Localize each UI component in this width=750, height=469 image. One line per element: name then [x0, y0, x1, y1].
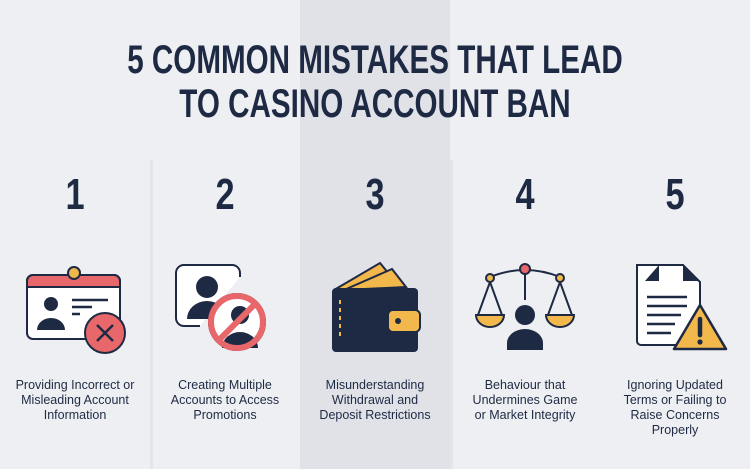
text 4 [473, 378, 577, 422]
title [127, 38, 623, 126]
icon: wallet [332, 262, 421, 352]
text 3 [319, 378, 431, 422]
icon: scales of justice with person [475, 263, 575, 350]
text 5: Properly [652, 423, 698, 437]
icon: ID card with x [26, 266, 126, 354]
text 5: Ignoring Updated [627, 378, 723, 392]
text 5 [624, 378, 726, 437]
number 1: 1 [65, 170, 85, 219]
text 4: Undermines Game [473, 393, 577, 407]
text 3: Withdrawal and [332, 393, 418, 407]
text 4: or Market Integrity [475, 408, 575, 422]
text 1: Misleading Account [21, 393, 129, 407]
number 5: 5 [665, 170, 685, 219]
text 1: Providing Incorrect or [16, 378, 134, 392]
text 2: Accounts to Access [171, 393, 279, 407]
text 5: Terms or Failing to [624, 393, 726, 407]
text 1: Information [44, 408, 106, 422]
text 4: Behaviour that [485, 378, 565, 392]
number 4: 4 [515, 170, 535, 219]
text 3: Deposit Restrictions [319, 408, 431, 422]
number 2: 2 [215, 170, 235, 219]
text 5: Raise Concerns [631, 408, 719, 422]
text 3: Misunderstanding [326, 378, 424, 392]
text 1 [16, 378, 134, 422]
icon: multiple accounts prohibited [175, 264, 266, 351]
text 2: Creating Multiple [178, 378, 272, 392]
text 2 [170, 378, 279, 422]
title: 5 COMMON MISTAKES THAT LEAD [127, 38, 623, 82]
title: TO CASINO ACCOUNT BAN [179, 82, 571, 126]
text 2: Promotions [193, 408, 257, 422]
icon: document with warning [636, 264, 728, 350]
number 3: 3 [365, 170, 385, 219]
